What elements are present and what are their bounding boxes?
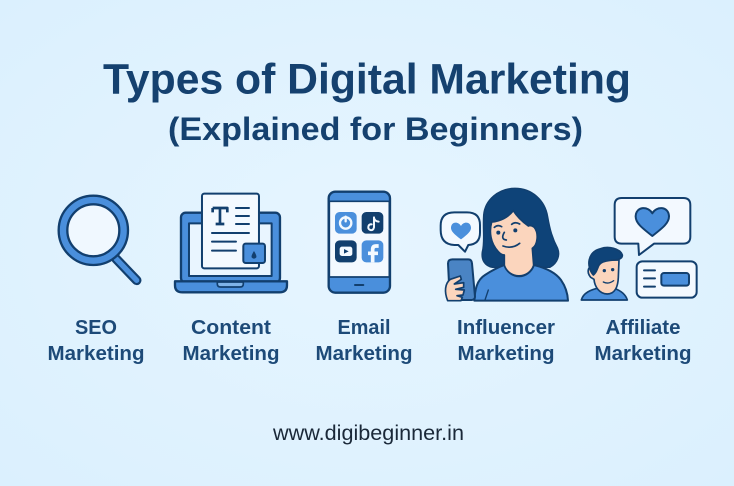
speech bubble with heart [615, 198, 690, 255]
label: Influencer Marketing [457, 317, 555, 365]
icon: affiliate person with heart bubble and card [581, 198, 697, 300]
phone in hand [445, 259, 475, 301]
icon: laptop with document [175, 194, 287, 292]
app tile: music note [362, 212, 383, 234]
label: Content Marketing [182, 317, 280, 365]
card with button [637, 261, 697, 298]
label: Email Marketing: Email [338, 317, 390, 339]
app tile: video play [335, 240, 357, 262]
person [581, 248, 627, 300]
neck and face [490, 211, 537, 276]
shoulders and top [474, 265, 568, 301]
label: Content Marketing: Content [191, 317, 271, 339]
label: Content Marketing: Marketing [182, 343, 280, 365]
icon: influencer woman with phone and heart bubble [441, 188, 568, 301]
app tile: f logo [362, 240, 383, 262]
hair [482, 188, 559, 267]
app tile: power [335, 212, 357, 234]
label: Affiliate Marketing: Affiliate [606, 317, 680, 339]
website url: www.digibeginner.in [272, 422, 464, 445]
icon: magnifying glass [59, 196, 137, 280]
title: Types of Digital Marketing [103, 56, 631, 104]
label: Affiliate Marketing [594, 317, 692, 365]
label: Email Marketing: Marketing [316, 343, 412, 365]
label: SEO Marketing: Marketing [48, 343, 144, 365]
label: Influencer Marketing: Marketing [458, 343, 554, 365]
label: Affiliate Marketing: Marketing [594, 343, 692, 365]
label: SEO Marketing: SEO [75, 317, 117, 339]
icon: phone with app tiles [329, 192, 390, 293]
label: Influencer Marketing: Influencer [457, 317, 555, 339]
speech bubble with heart [441, 212, 480, 252]
subtitle: (Explained for Beginners) [168, 111, 583, 147]
label: SEO Marketing [48, 317, 144, 365]
label: Email Marketing [316, 317, 412, 365]
